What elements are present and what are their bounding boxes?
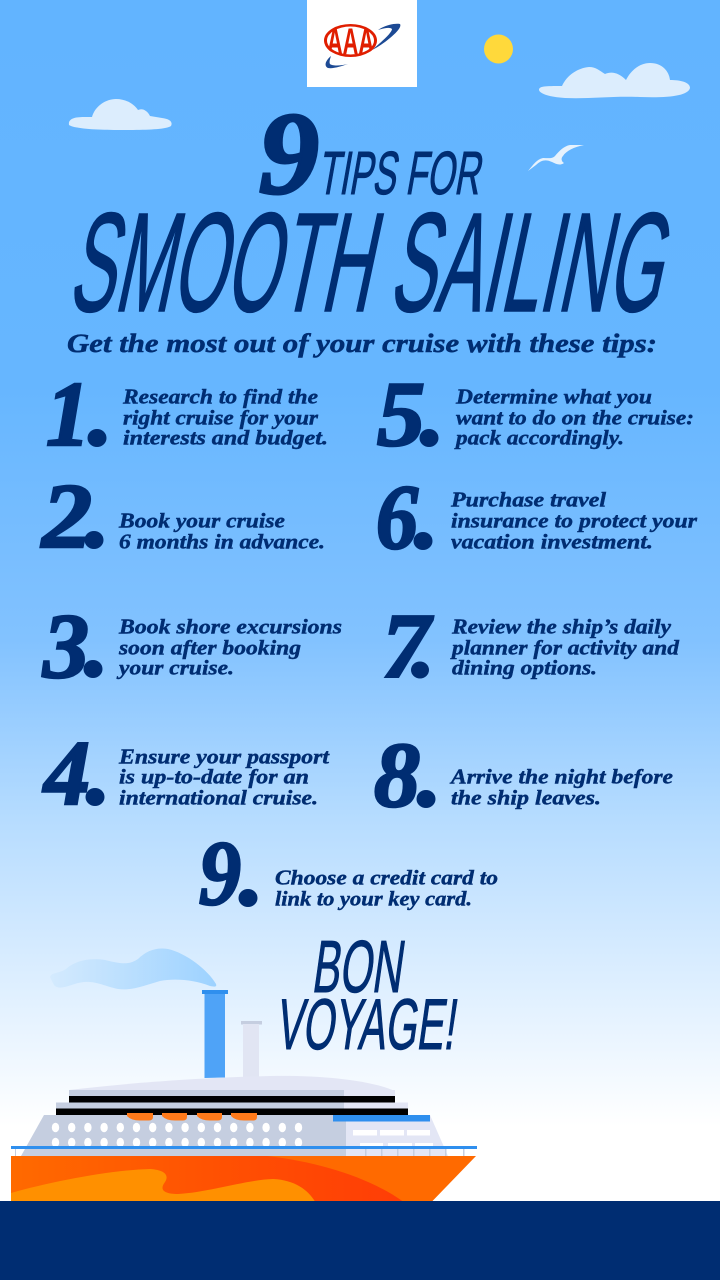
tip 4: is up-to-date for an [119,765,309,789]
illustration: cruise ship [11,990,477,1202]
tip 4: Ensure your passport [118,745,330,769]
icon: sun [484,34,513,64]
grey funnel [241,1021,262,1079]
tip 5: 5 [377,363,425,465]
bridge side [346,1115,448,1156]
tip 6: Purchase travel [450,488,606,512]
tip 3: 3 [42,595,89,697]
tip 7: 7 [382,595,434,697]
tip 7: dining options. [452,656,597,680]
tip 4: 4 [42,722,90,824]
words tips for: TIPS FOR [315,139,489,208]
sea band [0,1201,720,1280]
tip 8: 8 [374,724,420,826]
tip 3: your cruise. [116,656,234,680]
tip 2: Book your cruise [118,509,285,533]
hull yellow wave [11,1169,315,1202]
tip 1: right cruise for your [123,406,319,430]
icon: smoke [50,948,216,989]
tip 4 [42,722,330,824]
top deck dome [69,1076,395,1096]
tip 9: 9 [199,822,241,924]
closing: Bon Voyage [273,925,463,1065]
tip 2: 6 months in advance. [119,530,325,554]
tip 5 [377,363,694,465]
hull [11,1156,476,1202]
tip 9: Choose a credit card to [275,866,498,890]
tip 7: Review the ship’s daily [451,615,672,639]
tip 1 [46,363,328,465]
upper deck [69,1090,395,1102]
tip 1: 1 [46,363,90,465]
tip 6: vacation investment. [451,530,653,554]
tip 9 [199,822,498,924]
tip 5: want to do on the cruise: [456,406,694,430]
deck rail [11,1146,477,1156]
logo: AAA: AAA [327,21,374,62]
tip 2: 2 [40,465,92,567]
icon: seagull [528,145,584,171]
tip 1: interests and budget. [123,426,328,450]
tip 7 [382,595,680,697]
portholes [52,1123,302,1147]
tip 8: the ship leaves. [451,786,601,810]
tip 6: 6 [376,466,418,568]
tip 7: planner for activity and [450,636,680,660]
tip 8: Arrive the night before [449,765,673,789]
tip 3 [42,595,342,697]
tip 5: pack accordingly. [454,426,624,450]
lifeboats [127,1113,257,1120]
tip 5: Determine what you [455,385,652,409]
tip 6: insurance to protect your [451,509,698,533]
closing: Bon Voyage: BON [309,925,410,1008]
tip 2 [40,465,325,567]
tip 6 [376,466,698,568]
subtitle: Get the most out of your cruise with these tips: [67,329,657,358]
tip 4: international cruise. [119,786,318,810]
tip 8 [374,724,673,826]
title: 9 Tips For [259,88,489,219]
big numeral 9: 9 [259,88,319,219]
middle deck [56,1102,408,1115]
tip 1: Research to find the [122,385,318,409]
closing: Bon Voyage: VOYAGE! [273,985,463,1065]
tip 3: Book shore excursions [118,615,342,639]
lower superstructure [21,1115,346,1156]
logo: AAA [307,0,417,87]
blue funnel [202,990,228,1078]
tip 3: soon after booking [118,636,301,660]
tip 9: link to your key card. [275,887,472,911]
bridge windows [353,1130,433,1146]
icon: cloud left [69,99,172,130]
hull red wave [11,1156,403,1202]
bridge wing [333,1115,430,1122]
icon: cloud right [539,63,690,98]
